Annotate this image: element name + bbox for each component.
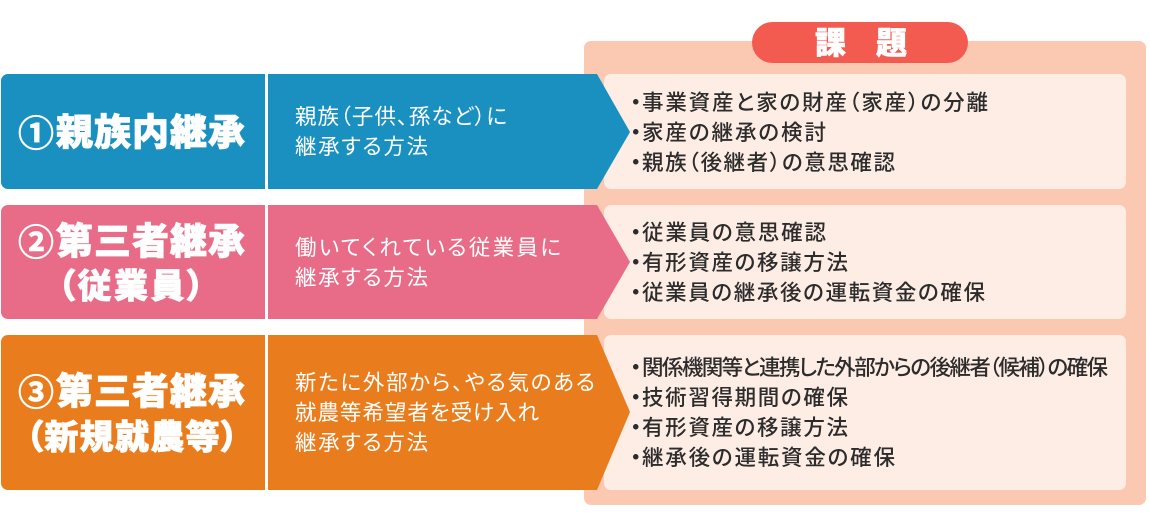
panel: challenges for row 3: 関係機関等と連携した外部からの後継者（候補）の確保 (642, 351, 1108, 382)
panel: challenges for row 1: 親族（後継者）の意思確認 (642, 146, 895, 177)
label cell: family succession: 親族内継承 (56, 102, 245, 156)
label cell: employee succession: ② (18, 214, 54, 266)
row 3: third party new farmer succession (1, 335, 630, 490)
panel: challenges for row 3: ・ (625, 381, 647, 412)
heading: challenges pill (752, 18, 968, 63)
panel: challenges for row 2: 従業員の意思確認 (642, 216, 826, 247)
panel: challenges for row 2 (604, 205, 1126, 319)
label cell: family succession (1, 74, 265, 189)
arrow: new farmer succession description (268, 335, 630, 490)
panel: challenges for row 3: 技術習得期間の確保 (642, 381, 848, 412)
label cell: employee succession: 第三者継承 (56, 211, 245, 265)
row 1: family succession (1, 74, 630, 189)
label cell: new farmer succession (1, 335, 265, 490)
panel: challenges for row 3: 継承後の運転資金の確保 (642, 441, 895, 472)
panel: challenges for row 1 (604, 74, 1126, 189)
panel: challenges for row 2: ・ (625, 276, 647, 307)
heading: challenges pill: 課 題 (815, 18, 907, 63)
panel: challenges background (584, 41, 1146, 505)
panel: challenges for row 1: 事業資産と家の財産（家産）の分離 (642, 86, 988, 117)
panel: challenges for row 2: 従業員の継承後の運転資金の確保 (642, 276, 985, 307)
panel: challenges for row 2: ・ (625, 246, 647, 277)
arrow: family succession description: 親族（子供、孫など）に (295, 100, 507, 131)
panel: challenges for row 3: ・ (625, 351, 647, 382)
arrow: employee succession description: 働いてくれている従業員に (295, 231, 561, 262)
label cell: new farmer succession: 第三者継承 (56, 361, 245, 415)
label cell: employee succession (1, 205, 265, 319)
arrow: new farmer succession description: 就農等希望者を受け入れ (295, 396, 539, 427)
panel: challenges for row 3: ・ (625, 411, 647, 442)
arrow: employee succession description: 継承する方法 (295, 261, 428, 292)
panel: challenges for row 3: 有形資産の移譲方法 (642, 411, 848, 442)
arrow: new farmer succession description: 継承する方法 (295, 426, 428, 457)
label cell: family succession: ① (18, 105, 54, 157)
panel: challenges for row 3: ・ (625, 441, 647, 472)
arrow: family succession description (268, 74, 630, 189)
panel: challenges for row 2: 有形資産の移譲方法 (642, 246, 848, 277)
row 2: third party employee succession (1, 205, 630, 319)
arrow: new farmer succession description: 新たに外部から、やる気のある (295, 366, 595, 397)
label cell: new farmer succession: ③ (18, 364, 54, 416)
panel: challenges for row 2: ・ (625, 216, 647, 247)
arrow: employee succession description (268, 205, 630, 319)
arrow: family succession description: 継承する方法 (295, 130, 428, 161)
panel: challenges for row 1: 家産の継承の検討 (642, 116, 826, 147)
label cell: employee succession: （従業員） (58, 259, 204, 308)
panel: challenges for row 1: ・ (625, 146, 647, 177)
label cell: new farmer succession: （新規就農等） (26, 410, 238, 459)
panel: challenges for row 1: ・ (625, 86, 647, 117)
panel: challenges for row 3 (604, 335, 1126, 490)
panel: challenges for row 1: ・ (625, 116, 647, 147)
